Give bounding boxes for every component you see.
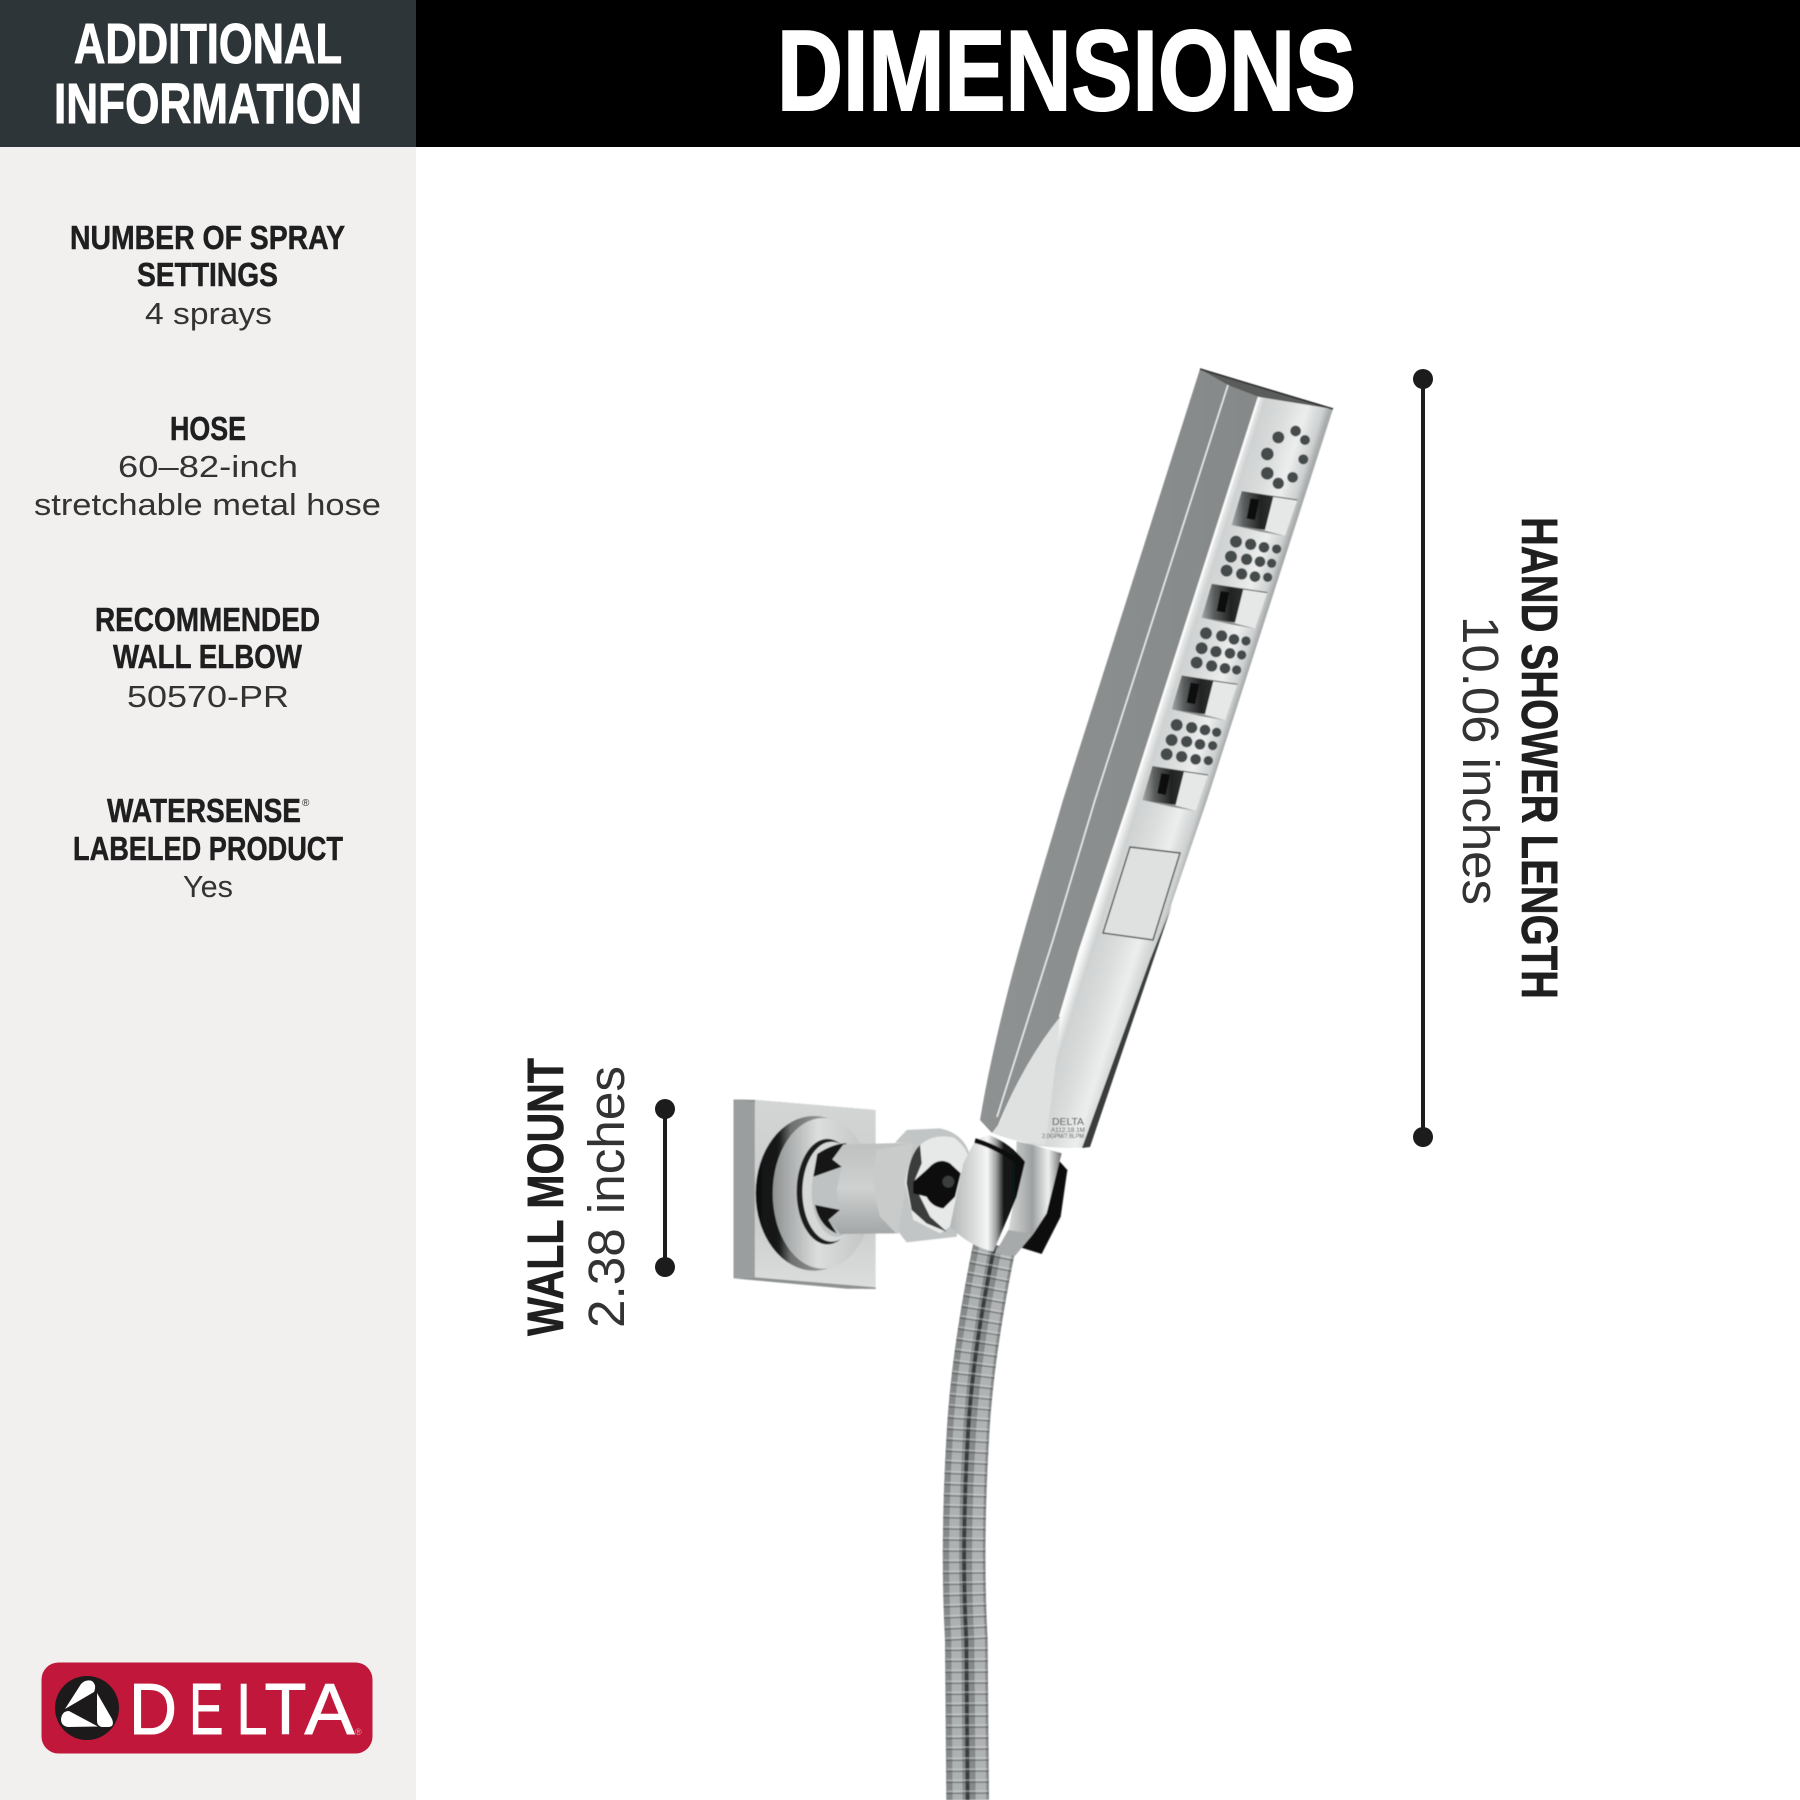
nozzle cluster 3	[1161, 719, 1221, 765]
model stamp: A112.18.1M	[1051, 1128, 1085, 1134]
groove line	[997, 385, 1228, 1117]
heading: dimensions: DIMENSIONS	[777, 8, 1356, 135]
text block: recommended wall elbow: WALL ELBOW	[113, 638, 303, 675]
panel: additional information header	[0, 0, 416, 147]
text block: number of spray settings	[70, 219, 345, 331]
model stamp: 2.0GPM/7.6LPM	[1042, 1133, 1084, 1140]
chrome face	[992, 397, 1333, 1148]
heading: additional information: ADDITIONAL	[74, 12, 342, 76]
text block: recommended wall elbow: RECOMMENDED	[95, 601, 320, 638]
nozzle cluster 1	[1221, 536, 1281, 582]
text block: watersense labeled product: WATERSENSE	[107, 792, 301, 829]
heading: additional information: INFORMATION	[54, 72, 362, 136]
top cap	[1200, 369, 1333, 409]
label: wall mount: WALL MOUNT	[517, 1058, 574, 1336]
label: hand shower length: 10.06 inches	[1452, 616, 1509, 905]
panel: dimensions header	[416, 0, 1800, 147]
hex nut	[895, 1128, 969, 1242]
light wedge near base	[992, 1017, 1060, 1145]
flange	[756, 1116, 872, 1271]
label: wall mount: 2.38 inches	[578, 1066, 635, 1328]
logo: delta	[42, 1662, 372, 1754]
black clip back	[1018, 1160, 1067, 1254]
text block: watersense labeled product	[73, 792, 343, 904]
icon: delta triangle mark	[55, 1676, 119, 1740]
panel: additional information sidebar	[0, 147, 416, 1800]
gray side face	[980, 369, 1259, 1133]
label: hand shower length: HAND SHOWER LENGTH	[1511, 517, 1568, 999]
stem	[828, 1143, 913, 1234]
pivot knob	[913, 1161, 961, 1208]
hand shower neck	[1008, 1140, 1062, 1234]
spray button 4	[1142, 767, 1208, 811]
text block: watersense labeled product: ®	[302, 798, 310, 809]
label: hand shower length	[1452, 517, 1568, 999]
nozzle cluster 2	[1191, 627, 1251, 675]
wordmark: delta: A	[304, 1670, 354, 1750]
blank button panel	[1103, 847, 1180, 940]
spray button 1	[1232, 492, 1297, 536]
model stamp	[1042, 1116, 1085, 1140]
text block: number of spray settings: NUMBER OF SPRAY	[70, 219, 345, 256]
text block: watersense labeled product: LABELED PRODUCT	[73, 830, 343, 867]
nozzle ring	[1261, 426, 1310, 489]
text block: hose: 60–82-inch	[118, 449, 298, 484]
hose	[954, 1245, 1008, 1800]
text block: hose	[34, 410, 381, 522]
text block: hose: HOSE	[170, 410, 246, 447]
product: hand shower with wall mount and hose	[733, 369, 1333, 1800]
wordmark: delta: E	[189, 1670, 224, 1750]
text block: number of spray settings: 4 sprays	[145, 296, 272, 331]
dimension line: wall mount	[655, 1099, 675, 1277]
text block: hose: stretchable metal hose	[34, 487, 381, 522]
hose collar	[995, 1230, 1033, 1256]
hand shower body	[980, 369, 1333, 1148]
holder	[950, 1135, 1025, 1252]
wordmark: delta: L	[236, 1670, 268, 1750]
label: wall mount	[517, 1058, 635, 1336]
wordmark: delta: T	[264, 1670, 306, 1750]
text block: number of spray settings: SETTINGS	[137, 256, 278, 293]
wall mount	[733, 1099, 1067, 1289]
wordmark: delta: D	[129, 1670, 177, 1750]
logo: delta: ®	[355, 1727, 362, 1737]
mounting plate	[733, 1099, 755, 1278]
model stamp: DELTA	[1052, 1116, 1084, 1128]
wordmark: delta	[129, 1670, 354, 1750]
spray button 3	[1172, 676, 1237, 720]
text block: recommended wall elbow: 50570-PR	[127, 679, 289, 714]
spray nozzles and buttons	[1142, 426, 1310, 811]
edge highlight	[1060, 397, 1259, 1017]
text block: recommended wall elbow	[95, 601, 320, 714]
dimension line: hand shower length	[1413, 369, 1433, 1147]
right edge shadow	[1082, 905, 1172, 1148]
text block: watersense labeled product: Yes	[183, 869, 233, 904]
spray button 2	[1202, 584, 1267, 629]
